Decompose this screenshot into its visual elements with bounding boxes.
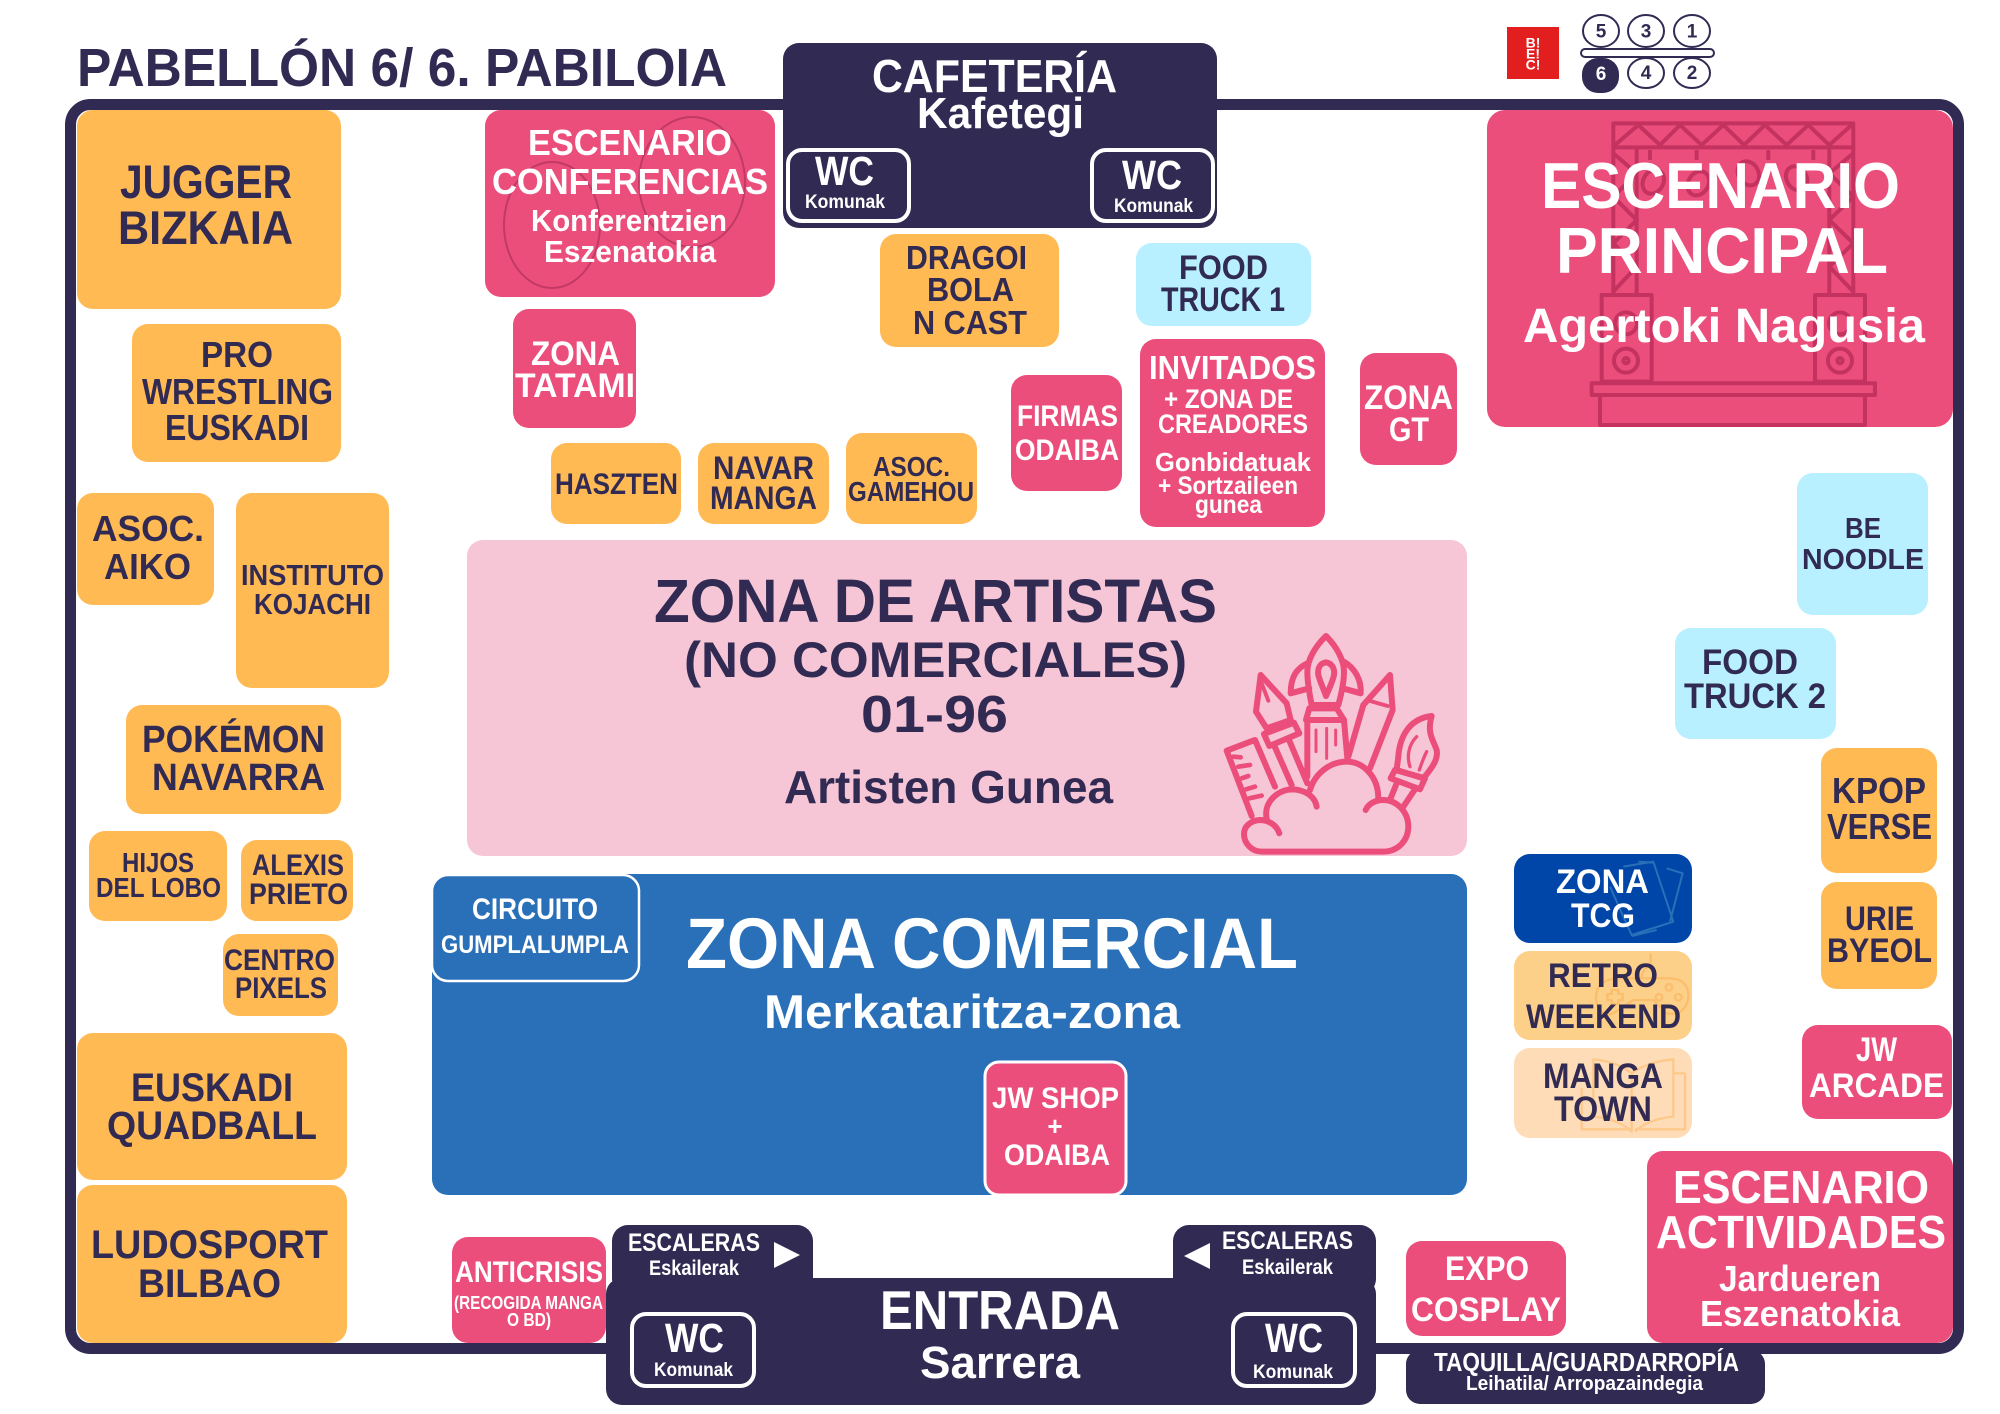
panel: Asoc. Gamehou: GAMEHOU xyxy=(848,476,974,507)
pavilion locator map: 5 xyxy=(1596,22,1607,42)
arrow: left xyxy=(1184,1243,1210,1269)
panel: Asoc. Aiko: ASOC. xyxy=(92,508,204,549)
panel: Ludosport Bilbao: BILBAO xyxy=(138,1262,281,1306)
panel: Zona TCG: ZONA xyxy=(1556,863,1649,901)
panel: Hijos del Lobo xyxy=(89,831,227,921)
Circuito Gumplalumpla: GUMPLALUMPLA xyxy=(441,931,629,959)
pavilion locator map: 3 xyxy=(1641,22,1651,42)
panel: Invitados + Zona de Creadores: + ZONA DE xyxy=(1164,384,1293,414)
panel: Kpop Verse: VERSE xyxy=(1827,806,1932,847)
WC right, entrance: WC xyxy=(1265,1315,1323,1361)
decorative stage outline xyxy=(1592,123,1875,425)
panel: Escenario Actividades: Eszenatokia xyxy=(1700,1293,1901,1334)
decorative cards outline xyxy=(1610,862,1683,936)
logo: BEC: E! xyxy=(1526,46,1540,62)
panel: Invitados + Zona de Creadores: gunea xyxy=(1195,491,1263,519)
panel: Pokémon Navarra: POKÉMON xyxy=(142,717,325,761)
panel: Urie Byeol: URIE xyxy=(1845,900,1914,938)
panel: Alexis Prieto xyxy=(241,840,353,921)
panel: Jugger Bizkaia xyxy=(77,110,341,309)
panel: Anticrisis xyxy=(452,1237,606,1343)
panel: Invitados + Zona de Creadores: INVITADOS xyxy=(1149,349,1316,386)
panel: JW Arcade: ARCADE xyxy=(1809,1067,1944,1105)
panel: Pro Wrestling Euskadi: EUSKADI xyxy=(165,407,309,448)
panel: Urie Byeol xyxy=(1821,882,1937,989)
panel: Invitados + Zona de Creadores: CREADORES xyxy=(1158,409,1308,439)
JW Shop + Odaiba: JW SHOP xyxy=(992,1082,1119,1115)
pavilion locator map: 1 xyxy=(1687,22,1698,42)
logo: BEC: B! xyxy=(1526,34,1540,50)
pavilion locator map: 6 xyxy=(1596,64,1606,85)
panel: Escenario Conferencias: CONFERENCIAS xyxy=(492,161,768,202)
panel: Escenario Actividades xyxy=(1647,1151,1953,1343)
arrow: right xyxy=(774,1242,800,1268)
panel: Be Noodle: BE xyxy=(1845,513,1881,545)
panel: Urie Byeol: BYEOL xyxy=(1827,932,1932,970)
WC right, entrance: Komunak xyxy=(1253,1362,1333,1383)
panel: Escenario Actividades: Jardueren xyxy=(1719,1258,1881,1299)
panel: Euskadi Quadball: QUADBALL xyxy=(107,1104,317,1148)
panel: Asoc. Aiko: AIKO xyxy=(104,546,191,587)
panel: Anticrisis: (RECOGIDA MANGA xyxy=(454,1293,603,1313)
panel: Kpop Verse: KPOP xyxy=(1832,770,1926,811)
panel: Invitados + Zona de Creadores: + Sortzaileen xyxy=(1158,472,1298,500)
panel: Euskadi Quadball: EUSKADI xyxy=(131,1066,293,1110)
panel: Zona Comercial: Merkataritza-zona xyxy=(764,985,1181,1038)
panel: Escaleras left xyxy=(612,1225,813,1295)
panel: Zona de Artistas: Artisten Gunea xyxy=(784,761,1113,813)
panel: Retro Weekend: WEEKEND xyxy=(1526,998,1681,1036)
panel: Asoc. Aiko xyxy=(77,493,214,605)
panel: Manga Town: TOWN xyxy=(1554,1090,1652,1129)
panel: Zona de Artistas xyxy=(467,540,1467,856)
panel: cafeteria: CAFETERÍA xyxy=(872,50,1117,102)
panel: Zona Comercial xyxy=(432,874,1467,1195)
panel: Pro Wrestling Euskadi: WRESTLING xyxy=(142,371,333,412)
panel: Zona de Artistas: 01-96 xyxy=(861,686,1008,744)
panel: Kpop Verse xyxy=(1821,748,1937,873)
pavilion locator map xyxy=(1581,15,1714,93)
panel: Pokémon Navarra: NAVARRA xyxy=(152,757,325,799)
decorative game controller outline xyxy=(1596,953,1688,1014)
panel: Escenario Actividades: ESCENARIO xyxy=(1673,1161,1929,1213)
panel: Anticrisis: ANTICRISIS xyxy=(455,1256,603,1289)
Circuito Gumplalumpla xyxy=(432,875,639,981)
panel: Taquilla / Guardarropía: Leihatila/ Arropazaindegia xyxy=(1466,1373,1704,1395)
panel: Taquilla / Guardarropía xyxy=(1406,1347,1765,1404)
panel: Navar Manga xyxy=(698,443,829,524)
WC right, cafeteria xyxy=(1092,150,1213,221)
panel: Invitados + Zona de Creadores: Gonbidatuak xyxy=(1155,447,1312,477)
panel: Invitados + Zona de Creadores xyxy=(1140,339,1325,527)
WC left, cafeteria: WC xyxy=(815,148,874,194)
panel: Escenario Actividades: ACTIVIDADES xyxy=(1656,1206,1946,1258)
pavilion locator map: 2 xyxy=(1687,63,1697,84)
panel: Escenario Principal: ESCENARIO xyxy=(1541,149,1900,222)
panel: Zona TCG xyxy=(1514,854,1692,943)
panel: Jugger Bizkaia: JUGGER xyxy=(120,155,292,208)
panel: Zona GT: ZONA xyxy=(1364,379,1453,417)
panel: Be Noodle xyxy=(1797,473,1928,615)
panel: Dragoi Bola N Cast: DRAGOI xyxy=(906,239,1027,276)
JW Shop + Odaiba: + xyxy=(1047,1111,1063,1141)
panel: Asoc. Gamehou xyxy=(846,433,977,524)
panel: Jugger Bizkaia: BIZKAIA xyxy=(118,201,293,254)
panel: Alexis Prieto: PRIETO xyxy=(249,878,348,911)
panel: Zona Comercial: ZONA COMERCIAL xyxy=(686,905,1298,984)
panel: Instituto Kojachi: KOJACHI xyxy=(254,589,371,621)
panel: Firmas Odaiba: FIRMAS xyxy=(1017,400,1118,433)
WC right, cafeteria: Komunak xyxy=(1114,196,1193,217)
decorative head outlines, conferencias xyxy=(504,117,745,288)
panel: Food Truck 2: TRUCK 2 xyxy=(1684,677,1826,716)
WC left, cafeteria: Komunak xyxy=(805,192,885,213)
panel: Dragoi Bola N Cast: N CAST xyxy=(913,304,1027,341)
panel: Zona Tatami xyxy=(513,309,636,428)
panel: Haszten xyxy=(551,443,681,524)
panel: Hijos del Lobo: DEL LOBO xyxy=(96,872,221,903)
panel: Escenario Principal xyxy=(1487,110,1953,427)
panel: Food Truck 1: FOOD xyxy=(1179,249,1268,287)
panel: Be Noodle: NOODLE xyxy=(1802,544,1924,576)
panel: Zona de Artistas: (NO COMERCIALES) xyxy=(684,632,1187,688)
panel: Zona GT xyxy=(1360,353,1457,465)
panel: Pro Wrestling Euskadi xyxy=(132,324,341,462)
panel: Entrada: Sarrera xyxy=(920,1337,1081,1388)
panel: Expo Cosplay xyxy=(1406,1241,1566,1336)
panel: JW Arcade: JW xyxy=(1856,1031,1898,1069)
panel: Escenario Conferencias: Eszenatokia xyxy=(544,234,717,269)
WC left, entrance xyxy=(632,1314,754,1386)
panel: Retro Weekend xyxy=(1514,951,1692,1040)
JW Shop + Odaiba: ODAIBA xyxy=(1004,1139,1110,1172)
panel: Centro Pixels: PIXELS xyxy=(235,972,327,1005)
panel: Anticrisis: O BD) xyxy=(507,1310,551,1330)
panel: Zona TCG: TCG xyxy=(1571,897,1635,935)
panel: Navar Manga: MANGA xyxy=(710,480,817,516)
WC left, cafeteria xyxy=(788,148,909,221)
panel: Food Truck 2 xyxy=(1675,628,1836,739)
panel: Escenario Principal: Agertoki Nagusia xyxy=(1523,300,1925,353)
panel: Centro Pixels xyxy=(223,934,338,1016)
panel: Haszten: HASZTEN xyxy=(555,468,678,501)
panel: Centro Pixels: CENTRO xyxy=(224,944,335,977)
panel: Escaleras right: Eskailerak xyxy=(1242,1256,1333,1279)
panel: Instituto Kojachi: INSTITUTO xyxy=(241,560,384,592)
Circuito Gumplalumpla: CIRCUITO xyxy=(472,893,598,926)
panel: Firmas Odaiba xyxy=(1011,375,1122,491)
JW Shop + Odaiba xyxy=(985,1062,1126,1195)
WC left, entrance: Komunak xyxy=(654,1360,733,1381)
panel: JW Arcade xyxy=(1802,1025,1952,1119)
panel: Entrada: ENTRADA xyxy=(880,1279,1120,1341)
panel: Taquilla / Guardarropía: TAQUILLA/GUARDARROPÍA xyxy=(1434,1347,1739,1377)
panel: Instituto Kojachi xyxy=(236,493,389,688)
panel: Escaleras right xyxy=(1173,1225,1376,1295)
panel: Manga Town xyxy=(1514,1048,1692,1138)
panel: Manga Town: MANGA xyxy=(1543,1057,1663,1096)
panel: cafeteria: Kafetegi xyxy=(917,89,1084,138)
panel: Asoc. Gamehou: ASOC. xyxy=(873,451,950,482)
panel: Firmas Odaiba: ODAIBA xyxy=(1015,434,1119,467)
panel: Pokémon Navarra xyxy=(126,705,341,814)
pavilion locator map: 4 xyxy=(1641,63,1652,84)
panel: Pro Wrestling Euskadi: PRO xyxy=(201,334,273,375)
panel: Food Truck 2: FOOD xyxy=(1702,643,1798,682)
panel: Entrada xyxy=(606,1278,1376,1405)
panel: Dragoi Bola N Cast: BOLA xyxy=(927,271,1014,308)
panel: cafeteria xyxy=(783,43,1217,228)
WC left, entrance: WC xyxy=(665,1315,724,1361)
panel: Zona Tatami: ZONA xyxy=(531,335,620,373)
panel: Escenario Conferencias: ESCENARIO xyxy=(528,122,732,163)
panel: Euskadi Quadball xyxy=(77,1033,347,1180)
panel: Ludosport Bilbao xyxy=(77,1185,347,1343)
panel: Escenario Principal: PRINCIPAL xyxy=(1556,214,1888,287)
panel: Escaleras right: ESCALERAS xyxy=(1222,1227,1353,1255)
panel: Food Truck 1 xyxy=(1136,243,1311,326)
panel: Food Truck 1: TRUCK 1 xyxy=(1161,281,1285,319)
panel: Escenario Conferencias: Konferentzien xyxy=(531,203,727,238)
WC right, entrance xyxy=(1233,1314,1355,1386)
logo: BEC xyxy=(1507,27,1559,79)
panel: Ludosport Bilbao: LUDOSPORT xyxy=(91,1223,328,1267)
panel: Expo Cosplay: COSPLAY xyxy=(1411,1291,1561,1329)
panel: Escenario Conferencias xyxy=(485,110,775,297)
panel: Expo Cosplay: EXPO xyxy=(1445,1250,1529,1288)
title: PABELLÓN 6/ 6. PABILOIA xyxy=(77,38,727,98)
decorative open book outline xyxy=(1582,1059,1685,1132)
panel: Navar Manga: NAVAR xyxy=(713,450,814,486)
panel: Hijos del Lobo: HIJOS xyxy=(122,847,194,878)
panel: Escaleras left: Eskailerak xyxy=(649,1257,739,1280)
panel: Zona Tatami: TATAMI xyxy=(515,367,635,405)
panel: Dragoi Bola N Cast xyxy=(880,234,1059,347)
panel: Escaleras left: ESCALERAS xyxy=(628,1229,760,1257)
WC right, cafeteria: WC xyxy=(1122,152,1182,198)
logo: BEC: C! xyxy=(1526,56,1540,72)
panel: Retro Weekend: RETRO xyxy=(1548,957,1658,995)
panel: Zona GT: GT xyxy=(1389,411,1429,449)
panel: Alexis Prieto: ALEXIS xyxy=(252,849,344,882)
panel: Zona de Artistas: ZONA DE ARTISTAS xyxy=(654,567,1217,635)
icon: art tools and rocket in a cloud xyxy=(1227,636,1437,852)
